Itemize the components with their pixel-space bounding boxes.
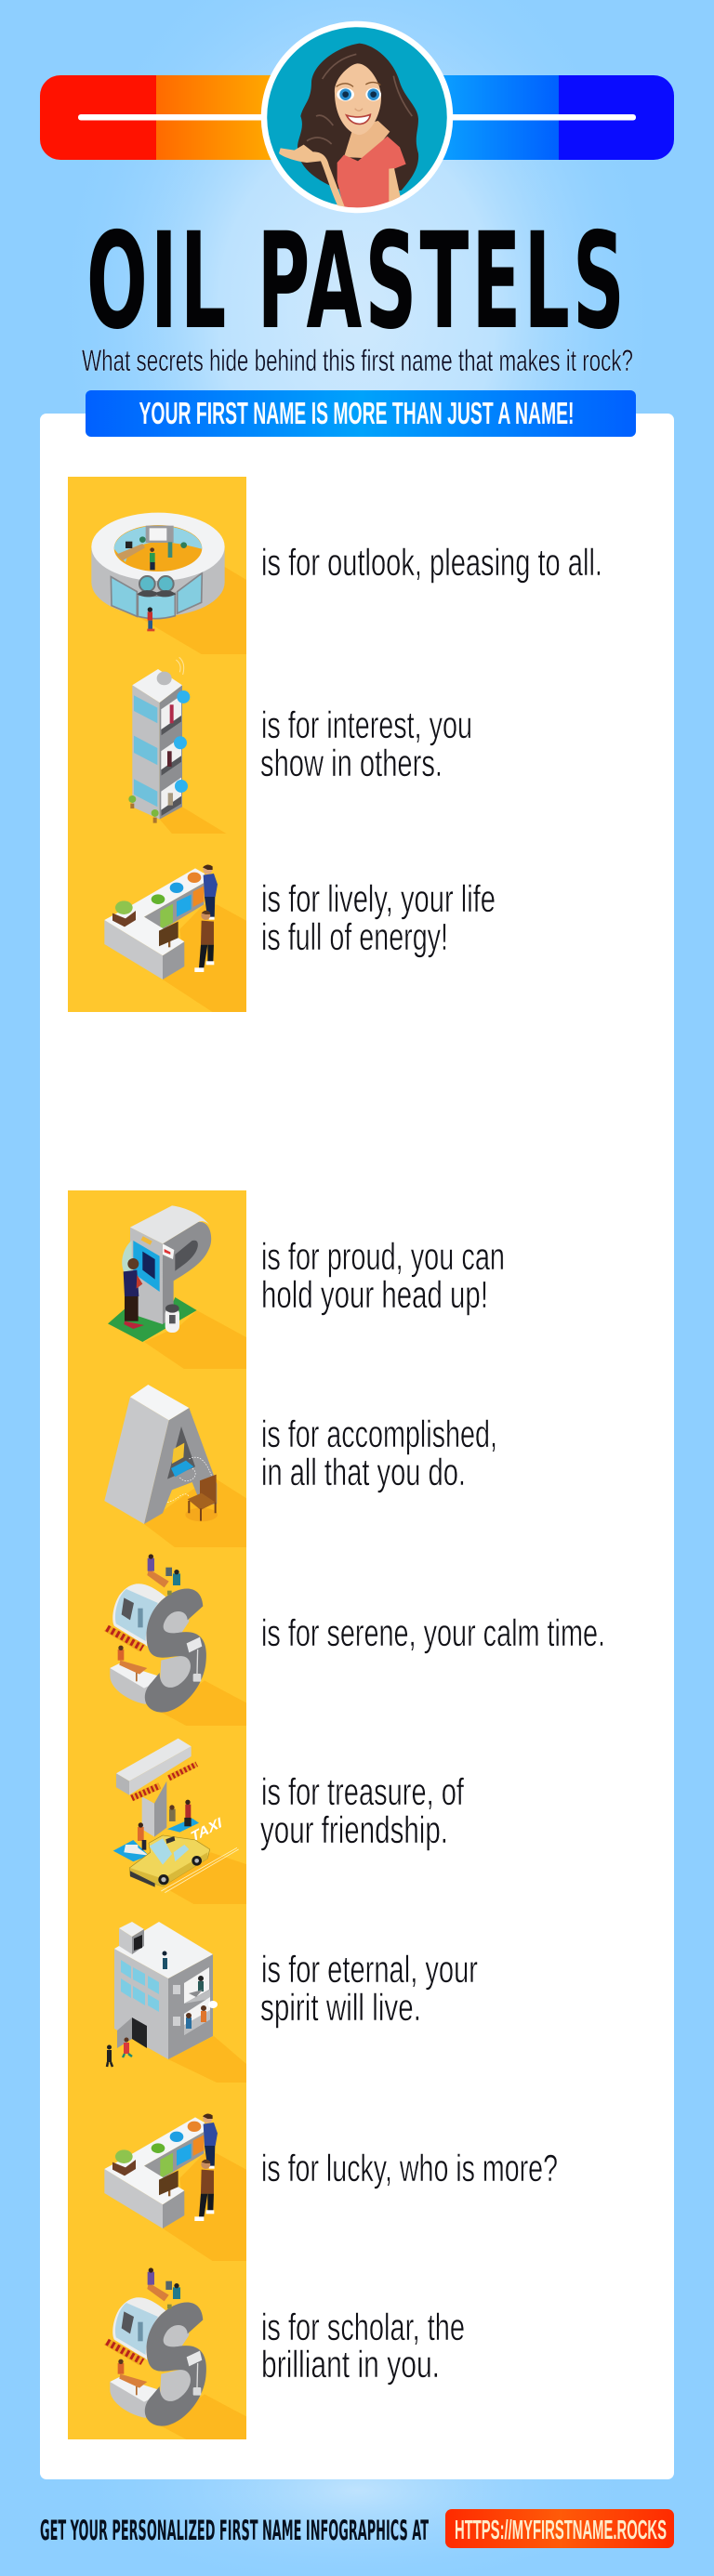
text: eternal: spirit will live. — [260, 1986, 421, 2029]
text: lively — [261, 877, 496, 958]
illustration: letter T taxi stand — [68, 1726, 246, 1904]
white content panel — [40, 414, 674, 2479]
footer URL button — [445, 2509, 674, 2548]
text: interest: is for interest, you — [261, 703, 472, 746]
text: lively: is for lively, your life — [261, 877, 496, 920]
text: scholar — [261, 2306, 465, 2385]
text: accomplished: is for accomplished, — [261, 1413, 497, 1455]
text: proud: hold your head up! — [261, 1273, 488, 1316]
text: accomplished — [261, 1413, 497, 1493]
text: proud: is for proud, you can — [261, 1235, 505, 1278]
header bar with gradient segments — [40, 75, 674, 160]
text: interest — [260, 703, 472, 784]
row: T treasure — [68, 1726, 464, 1905]
row: E eternal — [68, 1904, 478, 2083]
row: S scholar — [68, 2261, 465, 2441]
row: P proud — [68, 1190, 505, 1369]
text: eternal — [260, 1948, 478, 2029]
illustration: ring building O — [68, 477, 246, 655]
text: treasure: is for treasure, of — [261, 1770, 464, 1813]
text: lively: is full of energy! — [261, 915, 448, 958]
illustration: letter S building — [68, 1547, 246, 1726]
text: treasure: your friendship. — [260, 1808, 448, 1851]
illustration: letter S building repeat — [68, 2261, 246, 2439]
text: scholar: brilliant in you. — [261, 2343, 440, 2385]
text: lucky: is for lucky, who is more? — [261, 2147, 558, 2189]
text: eternal: is for eternal, your — [261, 1948, 478, 1991]
row: L lively — [68, 834, 496, 1013]
text: treasure — [260, 1770, 464, 1851]
row: S serene — [68, 1547, 605, 1728]
text: accomplished: in all that you do. — [261, 1451, 466, 1493]
illustration: letter T taxi stand: TAXI — [191, 1814, 223, 1847]
text: scholar: is for scholar, the — [261, 2306, 465, 2348]
illustration: recycling counter L — [68, 834, 246, 1012]
row: I interest — [68, 655, 472, 834]
illustration: recycling counter L repeat — [68, 2083, 246, 2261]
text: interest: show in others. — [260, 742, 443, 784]
illustration: office tower I — [68, 655, 246, 834]
banner — [86, 390, 636, 437]
avatar: woman in circle — [264, 24, 450, 210]
row: A accomplished — [68, 1369, 497, 1549]
illustration: office building E — [68, 1904, 246, 2083]
text: proud — [261, 1235, 505, 1316]
illustration: letter A building — [68, 1369, 246, 1547]
row: O outlook — [68, 477, 602, 655]
illustration: ATM letter P — [68, 1190, 246, 1369]
row: L lucky — [68, 2083, 558, 2262]
